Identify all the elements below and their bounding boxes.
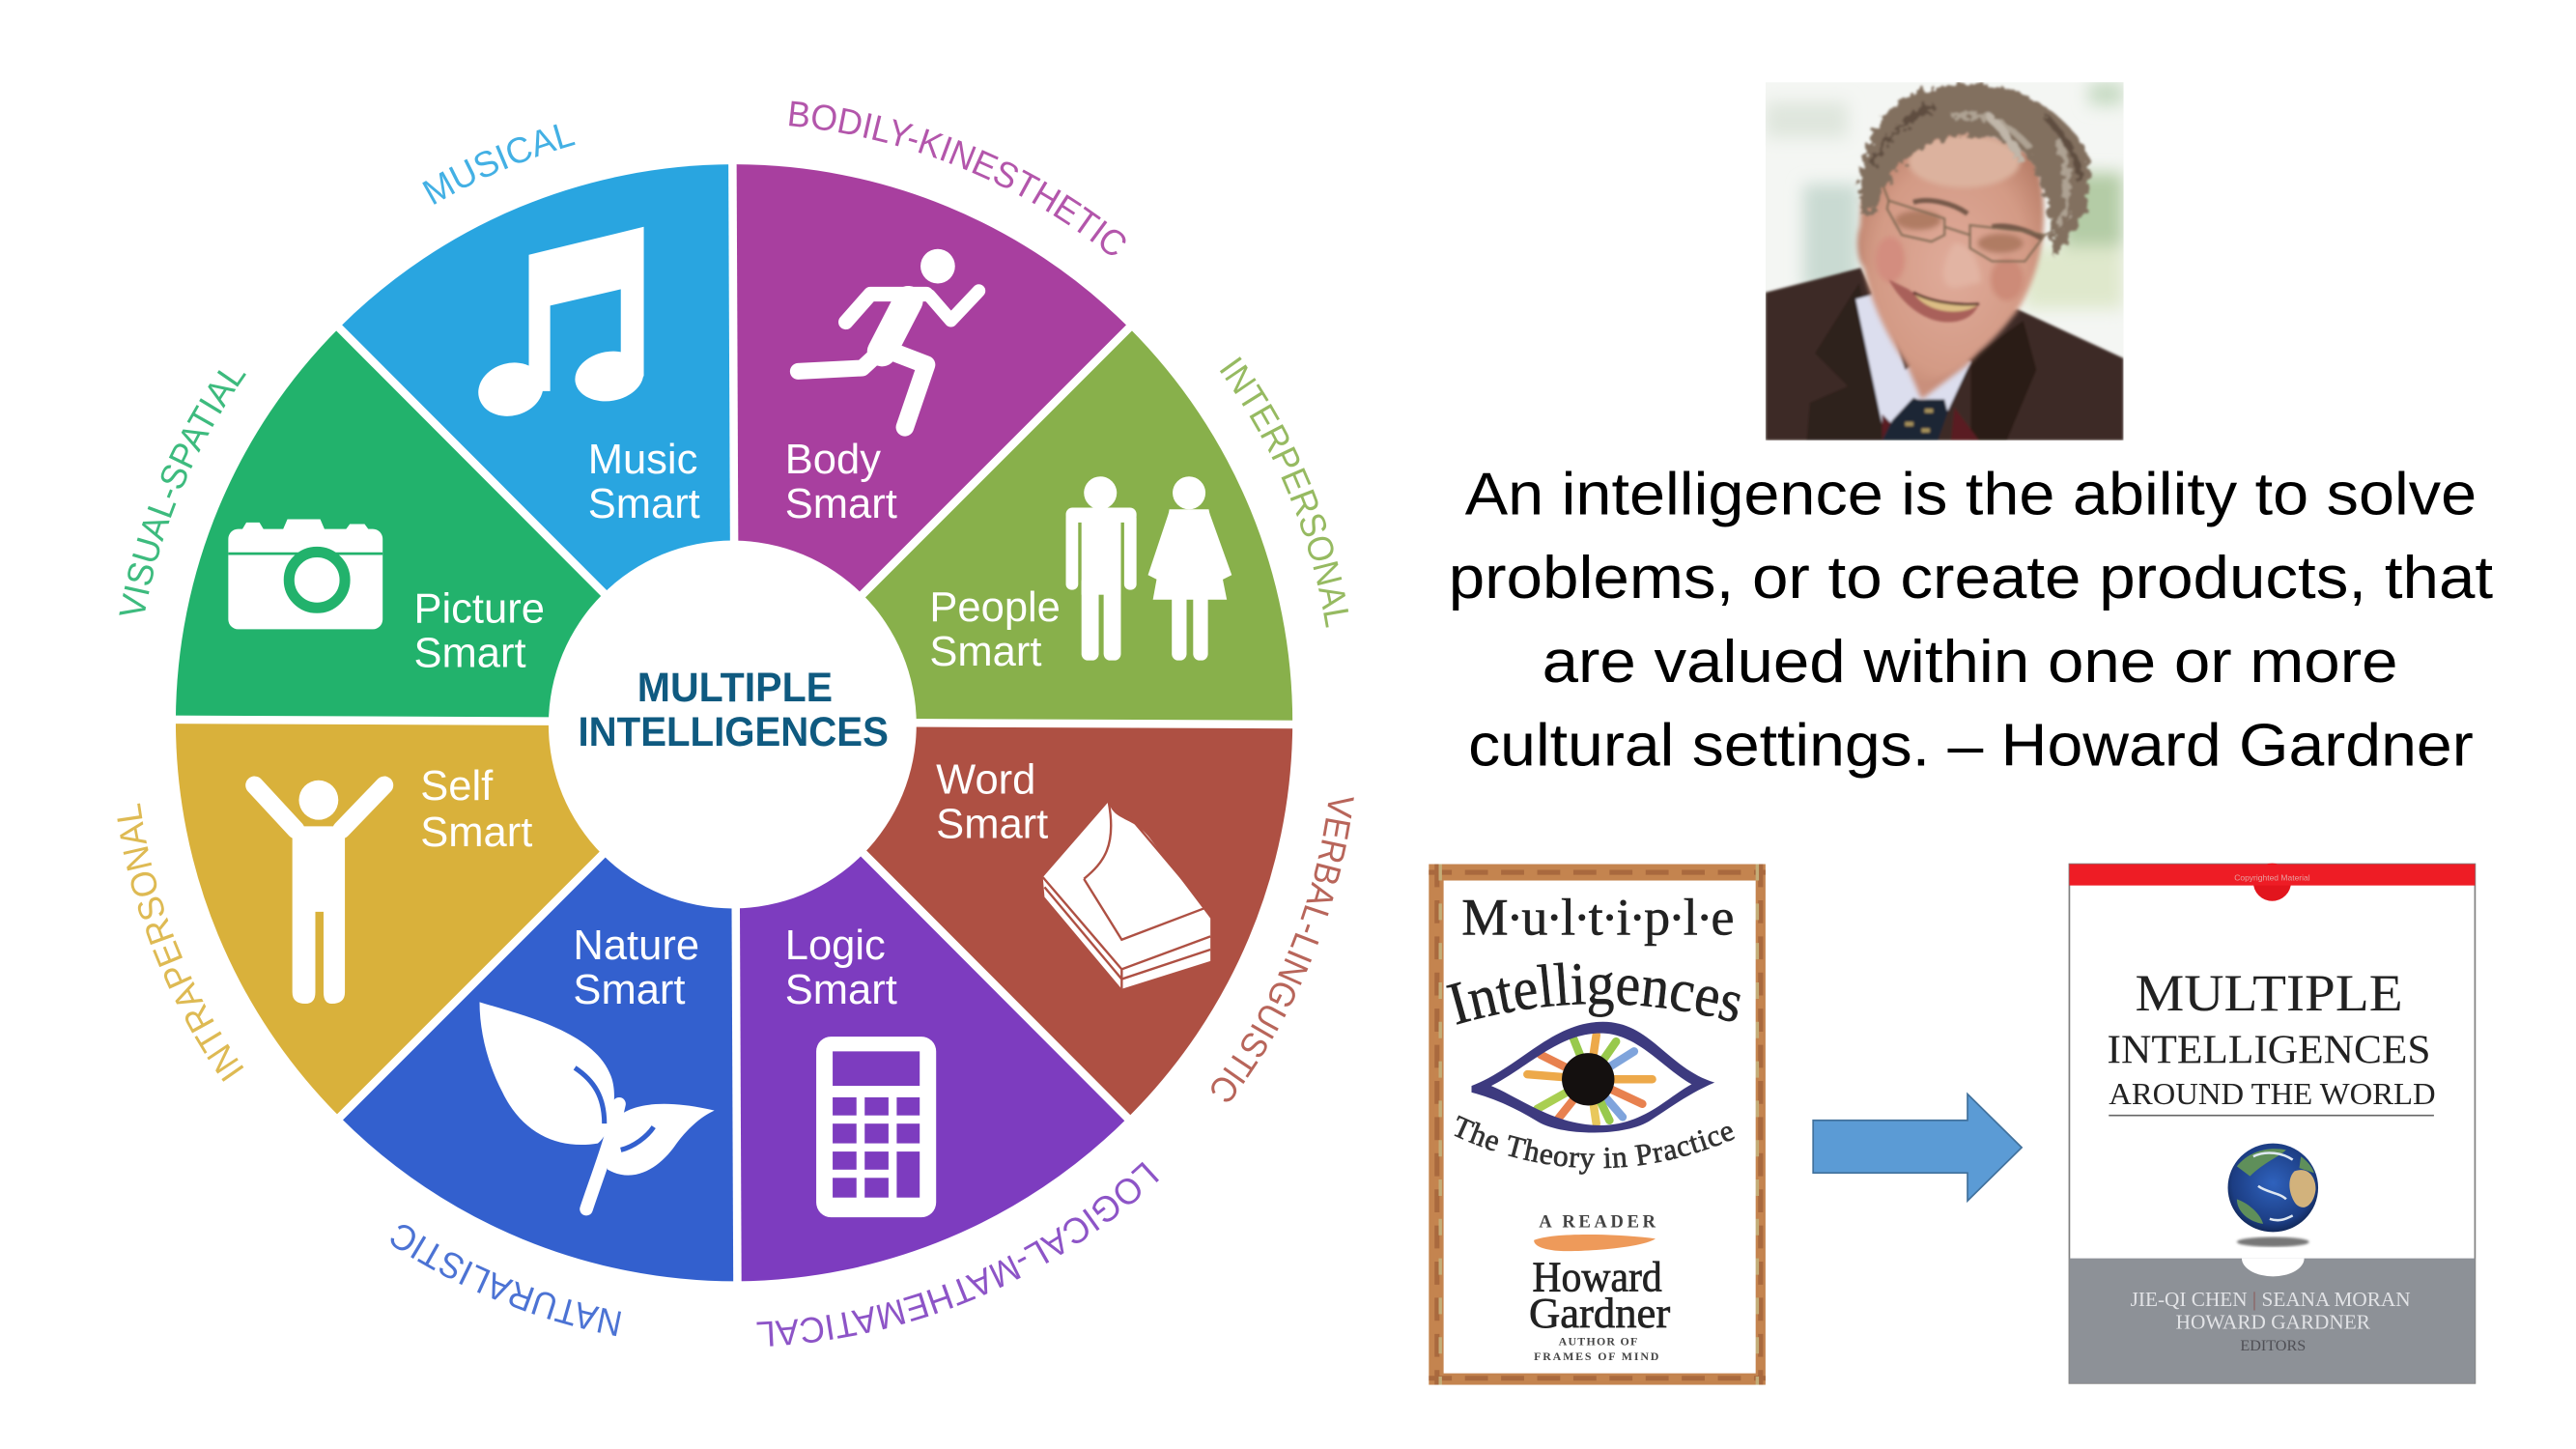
- label: people smart: Smart: [929, 629, 1041, 675]
- blazer: [1766, 268, 2124, 440]
- editors label: EDITORS: [2240, 1338, 2306, 1354]
- outer label: logical-mathematical: LOGICAL-MATHEMATICAL: [756, 1161, 1159, 1347]
- icon: person with raised arms: [255, 781, 384, 1004]
- wedge: music smart: [339, 164, 734, 723]
- wedge: picture smart: [176, 327, 734, 723]
- red header bar: Copyrighted Material: [2234, 873, 2310, 883]
- grey footer band: [2069, 1259, 2475, 1383]
- outer label: intrapersonal: INTRAPERSONAL: [117, 804, 243, 1082]
- book title: M·u·l·t·i·p·l·e: [1461, 889, 1735, 947]
- book title: AROUND THE WORLD: [2109, 1077, 2436, 1111]
- icon: man and woman: [1066, 476, 1231, 661]
- wedge: self smart: [176, 720, 734, 1117]
- quote text: cultural settings. – Howard Gardner: [1468, 713, 2474, 780]
- quote text: are valued within one or more: [1543, 629, 2398, 696]
- book author: Gardner: [1529, 1290, 1671, 1337]
- label: self smart: Smart: [420, 810, 532, 856]
- book title: INTELLIGENCES: [2108, 1027, 2431, 1072]
- icon: runner: [798, 249, 978, 427]
- label: body smart: Smart: [785, 481, 897, 527]
- outer label: musical: MUSICAL: [422, 124, 576, 205]
- icon: open book: [1043, 802, 1210, 989]
- smile: [1888, 279, 1979, 322]
- wedge: nature smart: [340, 723, 737, 1281]
- book small print: AUTHOR OF: [1559, 1335, 1637, 1349]
- quote text: problems, or to create products, that: [1449, 545, 2493, 611]
- label: nature smart: Nature: [573, 923, 699, 969]
- book subtitle: The Theory in Practice: [1455, 1115, 1735, 1175]
- eyebrows: [1913, 201, 2042, 239]
- globe shadow: [2237, 1237, 2309, 1247]
- face: [1857, 129, 2044, 399]
- label: body smart: Body: [785, 437, 881, 483]
- centre circle: [549, 541, 917, 908]
- wedge: word smart: [734, 723, 1292, 1119]
- label: logic smart: Smart: [785, 967, 897, 1013]
- label: word smart: Word: [936, 756, 1035, 803]
- book title: MULTIPLE: [2135, 964, 2403, 1022]
- label: word smart: Smart: [936, 801, 1048, 847]
- outer label: verbal-linguistic: VERBAL-LINGUISTIC: [1211, 797, 1354, 1101]
- label: music smart: Music: [588, 437, 697, 483]
- wedge: people smart: [734, 327, 1292, 724]
- book title: Intelligences: [1446, 962, 1741, 1025]
- photo: Howard Gardner portrait: [1766, 82, 2124, 440]
- wheel dividers: [169, 157, 1299, 1288]
- arrow: [1813, 1094, 2022, 1201]
- editors names: JIE-QI CHEN | SEANA MORAN: [2131, 1288, 2411, 1311]
- book author: Howard: [1532, 1254, 1662, 1301]
- editors names: HOWARD GARDNER: [2176, 1311, 2371, 1334]
- shirt collar: [1855, 293, 1970, 427]
- waistcoat: [1882, 408, 1979, 440]
- icon: camera: [228, 519, 382, 629]
- book small print: FRAMES OF MIND: [1534, 1350, 1658, 1363]
- wedge: logic smart: [734, 723, 1126, 1281]
- icon: calculator: [816, 1037, 936, 1217]
- outer label: naturalistic: NATURALISTIC: [390, 1225, 621, 1337]
- glasses: [1882, 185, 2055, 264]
- outer label: bodily-kinesthetic: BODILY-KINESTHETIC: [789, 100, 1126, 255]
- wedge: body smart: [732, 164, 1129, 723]
- outer label: visual-spatial: VISUAL-SPATIAL: [119, 370, 246, 615]
- icon: plant: [480, 1002, 715, 1209]
- label: self smart: Self: [420, 763, 494, 810]
- book cover: Multiple Intelligences, The Theory in Practice: [1429, 864, 1766, 1385]
- panel: multiple intelligences wheel: [117, 100, 1354, 1347]
- label: picture smart: Picture: [413, 586, 545, 633]
- quote text: An intelligence is the ability to solve: [1465, 461, 2477, 527]
- label: nature smart: Smart: [573, 967, 685, 1013]
- tie: [1882, 399, 1948, 440]
- centre title: MULTIPLE: [637, 666, 833, 711]
- red header bar: [2069, 864, 2475, 901]
- centre title: INTELLIGENCES: [579, 710, 889, 755]
- label: people smart: People: [929, 584, 1061, 631]
- icon: music note: [472, 227, 647, 423]
- book cover: Multiple Intelligences Around the World: [2069, 864, 2475, 1383]
- label: picture smart: Smart: [413, 630, 526, 676]
- orange brush stroke: [1534, 1235, 1656, 1251]
- icon: globe: [2228, 1144, 2318, 1232]
- book title: [1446, 889, 1741, 1025]
- label: music smart: Smart: [588, 481, 700, 527]
- label: logic smart: Logic: [785, 923, 886, 969]
- icon: eye: [1472, 1022, 1714, 1133]
- book label: a reader: A READER: [1539, 1211, 1656, 1232]
- hair: [1858, 84, 2091, 256]
- outer label: interpersonal: INTERPERSONAL: [1219, 356, 1348, 628]
